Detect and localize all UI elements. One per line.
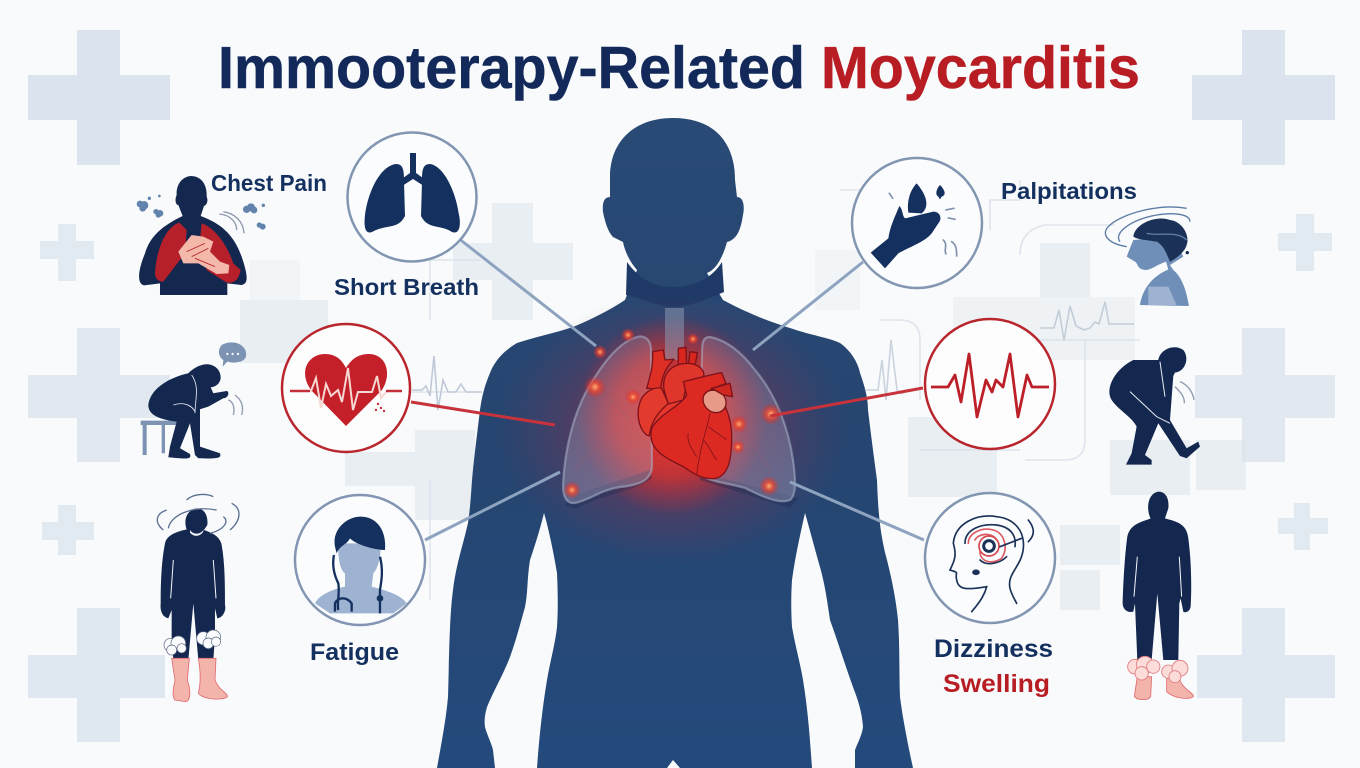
circle icon: heart with ECG bbox=[282, 324, 410, 452]
label: Chest Pain: Chest Pain bbox=[211, 170, 327, 196]
icon: person with chest pain bbox=[137, 176, 266, 295]
icon: person bending with leg pain bbox=[1109, 347, 1200, 465]
label: Swelling: Swelling bbox=[943, 670, 1050, 698]
icon: seated person coughing bbox=[141, 342, 246, 459]
icon: dizzy person with swollen legs bbox=[157, 494, 239, 702]
icon: dizzy person head profile bbox=[1105, 207, 1190, 306]
neck shadow bbox=[626, 262, 724, 307]
connector lines bbox=[411, 238, 924, 540]
label: Short Breath: Short Breath bbox=[334, 274, 479, 300]
central body silhouette bbox=[437, 118, 913, 768]
circle icon: brain in head bbox=[925, 493, 1055, 623]
lung shadow bbox=[565, 470, 798, 509]
chest glow and internal organs bbox=[497, 295, 847, 565]
sparks bbox=[563, 328, 782, 499]
circle icon: hand with droplets bbox=[852, 158, 982, 288]
label: Dizziness: Dizziness bbox=[934, 635, 1053, 663]
icon: standing person with swollen ankles bbox=[1123, 492, 1193, 700]
label: Fatigue: Fatigue bbox=[310, 639, 399, 666]
title: Immooterapy-Related Moycarditis bbox=[218, 35, 1140, 101]
circle icon: lungs bbox=[348, 132, 476, 262]
lungs bbox=[563, 337, 795, 503]
circle icon: fatigued patient bbox=[295, 495, 425, 625]
label: Palpitations: Palpitations bbox=[1001, 178, 1137, 204]
heart bbox=[638, 347, 733, 479]
circle icon: ECG waveform bbox=[925, 319, 1055, 449]
